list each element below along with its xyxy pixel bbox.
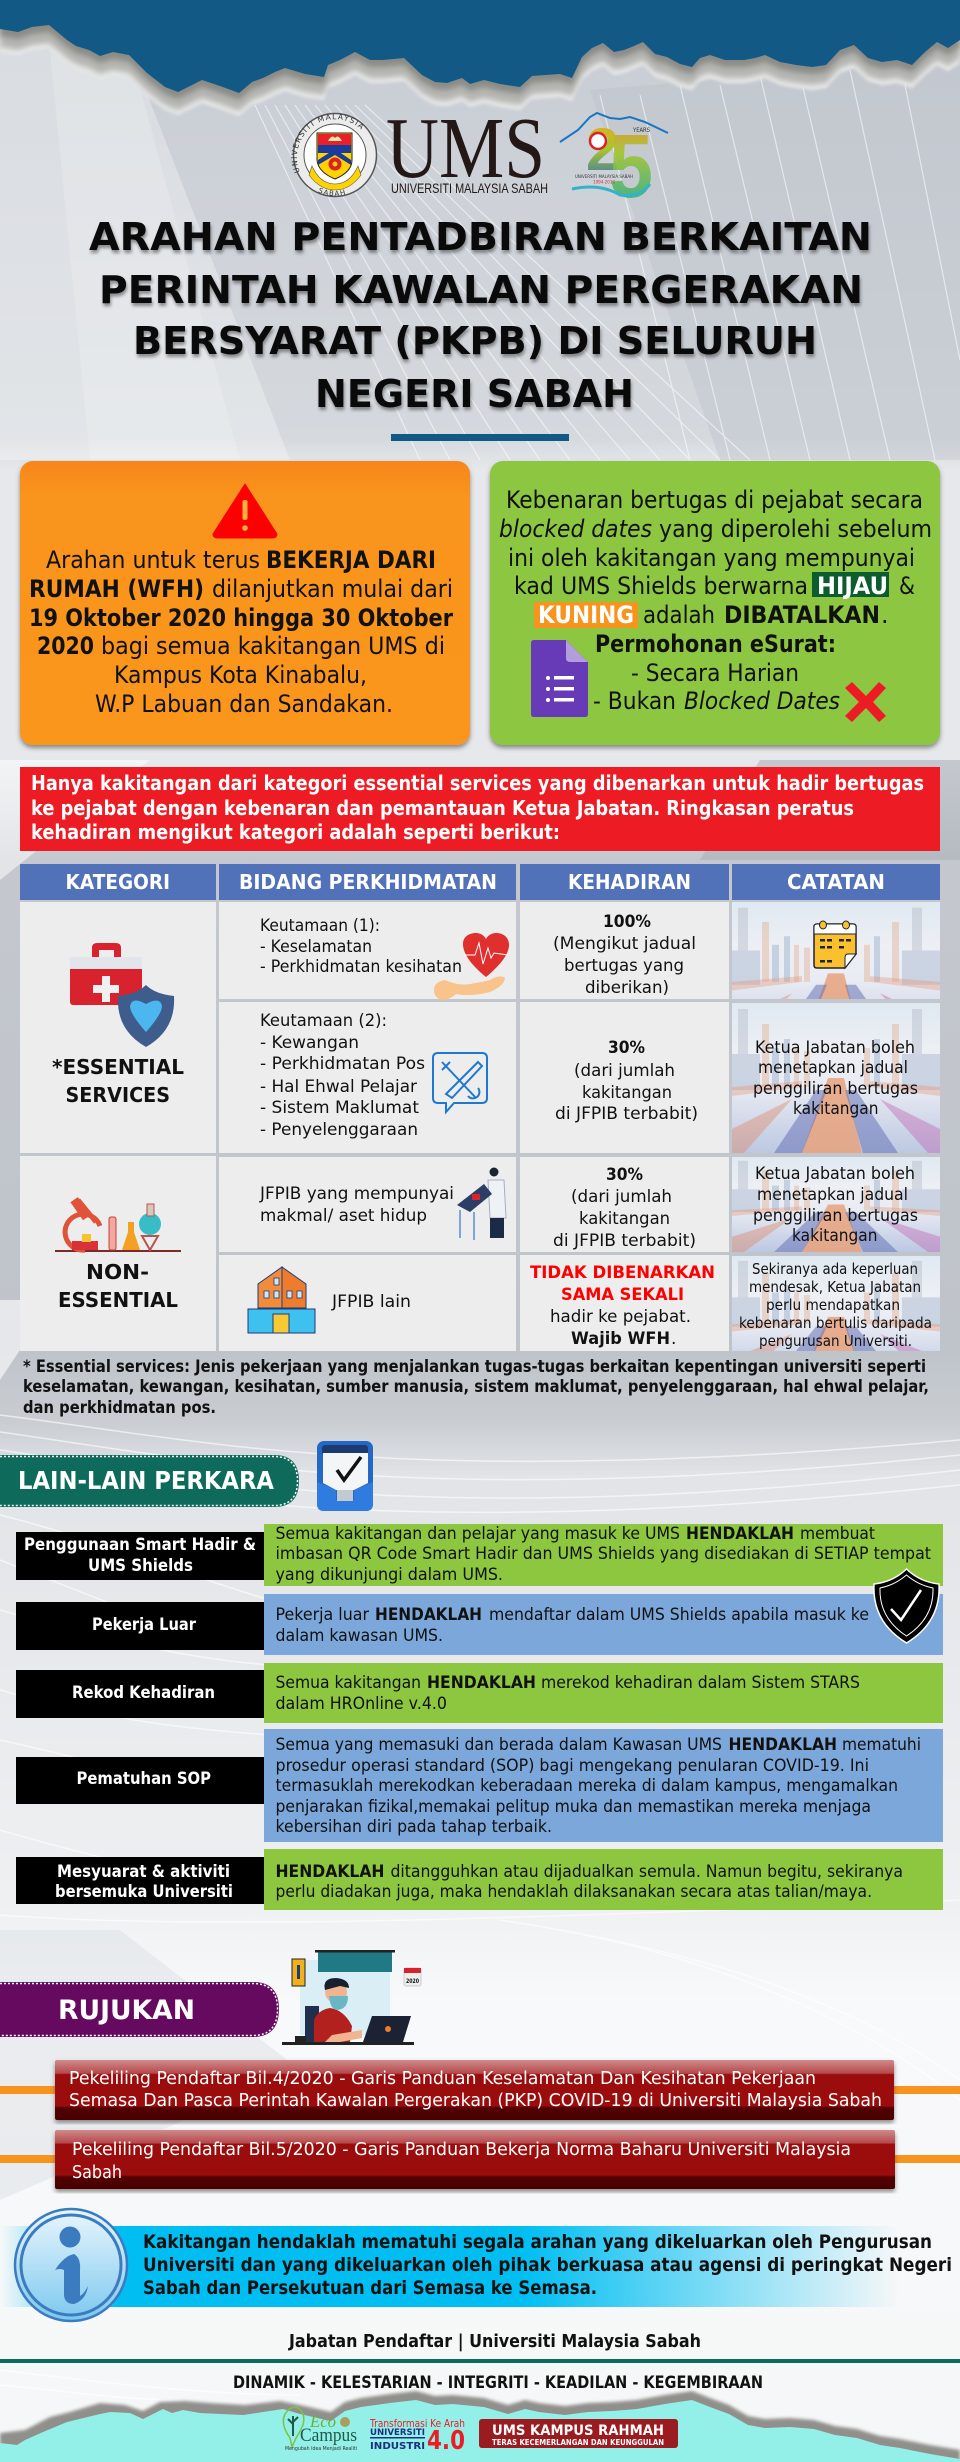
row: pekerja luar: HENDAKLAH xyxy=(375,1605,482,1625)
row: pekerja luar: Pekerja Luar xyxy=(92,1615,197,1635)
note: rotation schedule priority 2: kakitangan xyxy=(793,1099,878,1119)
cell: priority 1 services: - Perkhidmatan kesihatan xyxy=(260,957,462,977)
icon: masked person working on laptop: 2020 xyxy=(406,1978,419,1985)
notice text: W.P Labuan dan Sandakan. xyxy=(95,690,393,718)
blocked dates text: DIBATALKAN xyxy=(724,601,880,629)
title: BERSYARAT (PKPB) DI SELURUH xyxy=(133,319,817,363)
attendance: 30 percent priority 2: di JFPIB terbabit) xyxy=(555,1104,698,1124)
attendance: not allowed: . xyxy=(671,1329,676,1349)
torn paper bottom banner xyxy=(0,2391,960,2462)
icon: checklist tray xyxy=(317,1441,373,1511)
row: rekod kehadiran: Rekod Kehadiran xyxy=(72,1683,215,1703)
blocked dates text: yang diperolehi sebelum xyxy=(659,515,932,543)
logo: UMS wordmark: UNIVERSITI MALAYSIA SABAH xyxy=(391,181,548,196)
cell: priority 1 services xyxy=(219,902,516,1000)
attendance: 30 percent priority 2 xyxy=(520,1002,729,1153)
cell: non-essential category: NON- xyxy=(86,1260,149,1284)
row: rekod kehadiran: HENDAKLAH xyxy=(427,1673,536,1693)
notice text: BEKERJA DARI xyxy=(266,546,436,574)
icon: red cross xyxy=(845,682,886,722)
heading banner: lain-lain perkara xyxy=(0,1455,299,1507)
icon: laboratory equipment xyxy=(55,1197,181,1252)
note: rotation schedule labs: penggiliran bertugas xyxy=(753,1206,918,1226)
row: smart hadir: imbasan QR Code Smart Hadir dan UMS Shields yang disediakan di SETIAP tempat xyxy=(276,1544,931,1564)
row: pematuhan SOP: penjarakan fizikal,memakai pelitup muka dan memastikan mereka menjaga xyxy=(276,1797,871,1817)
cell: priority 2 services: - Penyelenggaraan xyxy=(260,1120,418,1140)
note: rotation schedule priority 2: menetapkan jadual xyxy=(758,1058,908,1078)
blocked dates text: kad UMS Shields berwarna xyxy=(514,572,808,600)
row: pematuhan SOP xyxy=(16,1729,943,1842)
logo: 25 years: 5 xyxy=(609,117,653,217)
logo: eco campus xyxy=(283,2407,357,2452)
logo: UMS wordmark: UMS xyxy=(386,99,545,196)
attendance: 100 percent: diberikan) xyxy=(585,978,669,998)
row: rekod kehadiran: Semua kakitangan xyxy=(276,1673,421,1693)
reference 2: Sabah xyxy=(72,2162,122,2183)
note: written permission: mendesak, Ketua Jabatan xyxy=(749,1278,921,1296)
cell: other service units: JFPIB lain xyxy=(331,1292,411,1312)
note: rotation schedule labs: kakitangan xyxy=(792,1226,878,1246)
logo: eco campus: Mengubah Idea Menjadi Realiti xyxy=(285,2446,357,2452)
logo: 25 years: UNIVERSITI MALAYSIA SABAH xyxy=(575,174,633,180)
notice text: Kampus Kota Kinabalu, xyxy=(114,661,367,689)
note: written permission xyxy=(732,1256,940,1378)
cell: essential services category: SERVICES xyxy=(66,1083,170,1107)
row: smart hadir: Penggunaan Smart Hadir & xyxy=(24,1535,256,1555)
logo: 25 years xyxy=(560,113,668,217)
cell: priority 1 services: - Keselamatan xyxy=(260,937,372,957)
blocked dates text: - Bukan xyxy=(593,687,676,715)
row: pekerja luar: Pekerja luar xyxy=(276,1605,369,1625)
table header: KATEGORI xyxy=(66,870,170,894)
footnote: essential services definition: dan perkhidmatan pos. xyxy=(23,1398,216,1418)
attendance: 30 percent labs xyxy=(520,1157,729,1252)
cell: other service units xyxy=(219,1255,516,1351)
blocked dates text: ini oleh kakitangan yang mempunyai xyxy=(508,544,915,572)
logo: UMS seal: SABAH xyxy=(318,188,345,196)
attendance: not allowed xyxy=(520,1255,729,1351)
cell: priority 2 services xyxy=(219,1002,516,1153)
table header xyxy=(20,864,940,900)
note: written permission: perlu mendapatkan xyxy=(766,1296,900,1314)
title xyxy=(89,215,872,416)
note: rotation schedule priority 2 xyxy=(732,1003,940,1153)
row: pematuhan SOP: mematuhi xyxy=(842,1735,921,1755)
cell: lab service units xyxy=(219,1157,516,1252)
logo: UMS kampus rahmah xyxy=(479,2419,678,2448)
blocked dates text: KUNING xyxy=(538,601,634,629)
attendance: 30 percent priority 2: kakitangan xyxy=(582,1083,672,1103)
cell: non-essential category xyxy=(20,1156,216,1351)
logo: 25 years: 1994-2019 xyxy=(593,180,615,186)
blocked dates text: adalah xyxy=(643,601,715,629)
row: rekod kehadiran: dalam HROnline v.4.0 xyxy=(276,1694,447,1714)
blocked dates text: & xyxy=(899,572,915,600)
attendance: 100 percent: bertugas yang xyxy=(564,956,684,976)
notice text: 2020 xyxy=(37,632,94,660)
footer divider line xyxy=(0,2359,960,2363)
cell: essential services category xyxy=(20,902,216,1153)
logo: eco campus: Campus xyxy=(300,2425,357,2446)
attendance: 30 percent labs: kakitangan xyxy=(579,1209,670,1229)
row: smart hadir: UMS Shields xyxy=(88,1556,193,1576)
notice text: dilanjutkan mulai dari xyxy=(212,575,453,603)
logo: universiti industri 4.0 xyxy=(369,2418,465,2456)
attendance: not allowed: SAMA SEKALI xyxy=(561,1285,684,1305)
row: mesyuarat xyxy=(16,1849,943,1910)
logo: universiti industri 4.0: 4.0 xyxy=(427,2426,465,2456)
cell: non-essential category: ESSENTIAL xyxy=(58,1288,178,1312)
note: written permission: kebenaran bertulis daripada xyxy=(739,1314,932,1332)
title underline bar xyxy=(391,434,569,441)
logo: eco campus: Eco xyxy=(309,2412,336,2431)
red instruction banner: kehadiran mengikut kategori adalah seperti berikut: xyxy=(31,820,560,844)
cell: lab service units: makmal/ aset hidup xyxy=(260,1206,427,1226)
attendance: 30 percent priority 2: 30% xyxy=(608,1038,645,1058)
attendance: not allowed: TIDAK DIBENARKAN xyxy=(530,1263,715,1283)
icon: masked person working on laptop xyxy=(282,1950,421,2045)
icon: forms document xyxy=(531,640,588,717)
row: smart hadir: yang dikunjungi dalam UMS. xyxy=(276,1565,503,1585)
row: smart hadir: HENDAKLAH xyxy=(686,1524,794,1544)
blocked dates text: . xyxy=(881,601,889,629)
reference 1: Pekeliling Pendaftar Bil.4/2020 - Garis Panduan Keselamatan Dan Kesihatan Pekerjaan xyxy=(69,2068,816,2089)
row: mesyuarat: perlu diadakan juga, maka hendaklah dilaksanakan secara atas talian/maya. xyxy=(276,1882,872,1902)
logo: 25 years: 2 xyxy=(586,116,619,183)
attendance: 30 percent labs: di JFPIB terbabit) xyxy=(553,1231,696,1251)
title: NEGERI SABAH xyxy=(315,372,634,416)
compliance reminder band xyxy=(0,2226,952,2307)
title: PERINTAH KAWALAN PERGERAKAN xyxy=(99,268,863,312)
table header: BIDANG PERKHIDMATAN xyxy=(239,870,497,894)
row: mesyuarat: HENDAKLAH xyxy=(276,1862,384,1882)
row: pematuhan SOP: prosedur operasi standard (SOP) bagi mengekang penularan COVID-19. Ini xyxy=(276,1756,869,1776)
note: written permission: pengurusan Universiti. xyxy=(759,1332,912,1350)
note: rotation schedule labs: menetapkan jadual xyxy=(757,1185,908,1205)
blocked dates text: blocked dates xyxy=(499,515,652,543)
blocked dates text: Permohonan eSurat: xyxy=(595,630,836,658)
row: smart hadir: Semua kakitangan dan pelajar yang masuk ke UMS xyxy=(276,1524,680,1544)
row: mesyuarat: Mesyuarat & aktiviti xyxy=(57,1862,230,1882)
notice text: RUMAH (WFH) xyxy=(29,575,204,603)
notice text: 19 Oktober 2020 hingga 30 Oktober xyxy=(29,604,453,632)
icon: heart in hand xyxy=(434,933,509,1000)
cell: priority 2 services: - Perkhidmatan Pos xyxy=(260,1054,425,1074)
reference 1 xyxy=(55,2060,894,2120)
note: rotation schedule priority 2: penggiliran bertugas xyxy=(753,1079,918,1099)
icon: tools chat bubble xyxy=(433,1053,487,1112)
reference connector lines xyxy=(0,2086,960,2163)
notice text: Arahan untuk terus xyxy=(46,546,260,574)
attendance table xyxy=(20,864,940,1378)
core values: DINAMIK - KELESTARIAN - INTEGRITI - KEADILAN - KEGEMBIRAAN xyxy=(233,2373,763,2393)
icon: scientist at desk xyxy=(457,1168,506,1240)
footnote: essential services definition xyxy=(23,1357,929,1418)
notice text xyxy=(29,546,453,718)
row: mesyuarat: bersemuka Universiti xyxy=(55,1882,233,1902)
row: pekerja luar: mendaftar dalam UMS Shields apabila masuk ke xyxy=(489,1605,869,1625)
department credit: Jabatan Pendaftar | Universiti Malaysia Sabah xyxy=(287,2331,701,2352)
red instruction banner xyxy=(20,767,940,851)
blocked dates text: Blocked Dates xyxy=(684,687,840,715)
row: pekerja luar xyxy=(16,1594,943,1655)
attendance: 30 percent labs: 30% xyxy=(606,1165,643,1185)
row: rekod kehadiran: merekod kehadiran dalam Sistem STARS xyxy=(541,1673,860,1693)
title: ARAHAN PENTADBIRAN BERKAITAN xyxy=(89,215,872,259)
heading banner: rujukan: RUJUKAN xyxy=(58,1995,195,2026)
cell: priority 1 services: Keutamaan (1): xyxy=(260,916,380,936)
icon: warning triangle xyxy=(213,484,277,538)
cell: priority 2 services: - Kewangan xyxy=(260,1033,359,1053)
logo: universiti industri 4.0: INDUSTRI xyxy=(370,2441,425,2452)
attendance: 100 percent: 100% xyxy=(603,912,651,932)
attendance: not allowed: hadir ke pejabat. xyxy=(550,1307,691,1327)
cell: priority 2 services: Keutamaan (2): xyxy=(260,1011,387,1031)
table header: CATATAN xyxy=(787,870,885,894)
attendance: not allowed: Wajib WFH xyxy=(571,1329,670,1349)
row: pekerja luar: dalam kawasan UMS. xyxy=(276,1626,443,1646)
blocked dates text: - Secara Harian xyxy=(631,659,799,687)
cell: priority 2 services: - Hal Ehwal Pelajar xyxy=(260,1077,417,1097)
row: pematuhan SOP: termasuklah merekodkan keberadaan mereka di dalam kampus, mengamalkan xyxy=(276,1776,898,1796)
cell: priority 2 services: - Sistem Maklumat xyxy=(260,1098,419,1118)
logo: UMS seal xyxy=(291,112,378,198)
red instruction banner: ke pejabat dengan kebenaran dan pemantauan Ketua Jabatan. Ringkasan peratus xyxy=(31,796,854,820)
heading banner: rujukan xyxy=(0,1982,279,2037)
note: rotation schedule labs: Ketua Jabatan boleh xyxy=(755,1164,915,1184)
icon: building xyxy=(248,1267,315,1333)
cell: essential services category: *ESSENTIAL xyxy=(52,1055,184,1079)
row: pematuhan SOP: HENDAKLAH xyxy=(728,1735,837,1755)
compliance reminder band: Sabah dan Persekutuan dari Semasa ke Semasa. xyxy=(143,2277,597,2299)
cell: lab service units: JFPIB yang mempunyai xyxy=(259,1184,454,1204)
blocked dates text: Kebenaran bertugas di pejabat secara xyxy=(506,486,923,514)
row: mesyuarat: ditangguhkan atau dijadualkan semula. Namun begitu, sekiranya xyxy=(390,1862,903,1882)
icon: first aid kit and shield xyxy=(70,943,174,1047)
logo: universiti industri 4.0: UNIVERSITI xyxy=(370,2428,425,2438)
row: pematuhan SOP: Pematuhan SOP xyxy=(76,1769,211,1789)
attendance: 30 percent labs: (dari jumlah xyxy=(571,1187,672,1207)
row: pematuhan SOP: kebersihan diri pada tahap terbaik. xyxy=(276,1817,552,1837)
attendance: 30 percent priority 2: (dari jumlah xyxy=(574,1061,675,1081)
row: pematuhan SOP: Semua yang memasuki dan berada dalam Kawasan UMS xyxy=(276,1735,722,1755)
logo: universiti industri 4.0: Transformasi Ke Arah xyxy=(369,2418,465,2430)
row: smart hadir xyxy=(16,1524,943,1586)
panel: work from home notice xyxy=(20,461,470,745)
note: rotation schedule labs xyxy=(732,1157,940,1252)
table header: KEHADIRAN xyxy=(568,870,691,894)
blocked dates text xyxy=(499,486,932,715)
logo: UMS kampus rahmah: TERAS KECEMERLANGAN DAN KEUNGGULAN xyxy=(492,2438,664,2447)
torn paper top banner xyxy=(0,0,960,116)
note: rotation schedule priority 2: Ketua Jabatan boleh xyxy=(755,1038,915,1058)
notice text: bagi semua kakitangan UMS di xyxy=(101,632,445,660)
reference 2: Pekeliling Pendaftar Bil.5/2020 - Garis Panduan Bekerja Norma Baharu Universiti Malaysia xyxy=(72,2139,851,2160)
row: rekod kehadiran xyxy=(16,1663,943,1723)
logo: 25 years: YEARS xyxy=(632,127,650,134)
logo: UMS seal: UNIVERSITI MALAYSIA xyxy=(291,114,363,174)
note: written permission: Sekiranya ada keperluan xyxy=(752,1260,918,1278)
icon: information symbol xyxy=(15,2209,127,2321)
panel: blocked dates cancelled xyxy=(490,461,940,745)
note: calendar xyxy=(732,902,940,1045)
row: smart hadir: membuat xyxy=(800,1524,875,1544)
logo: UMS kampus rahmah: UMS KAMPUS RAHMAH xyxy=(492,2423,664,2439)
attendance: 100 percent: (Mengikut jadual xyxy=(553,934,696,954)
reference 2 xyxy=(55,2130,895,2189)
reference 1: Semasa Dan Pasca Perintah Kawalan Pergerakan (PKP) COVID-19 di Universiti Malaysia Sabah xyxy=(69,2090,882,2111)
blocked dates text: HIJAU xyxy=(817,572,888,600)
icon: calendar xyxy=(814,921,856,968)
heading banner: lain-lain perkara: LAIN-LAIN PERKARA xyxy=(18,1466,274,1495)
icon: black shield with check xyxy=(874,1569,939,1643)
attendance: 100 percent xyxy=(520,902,729,999)
